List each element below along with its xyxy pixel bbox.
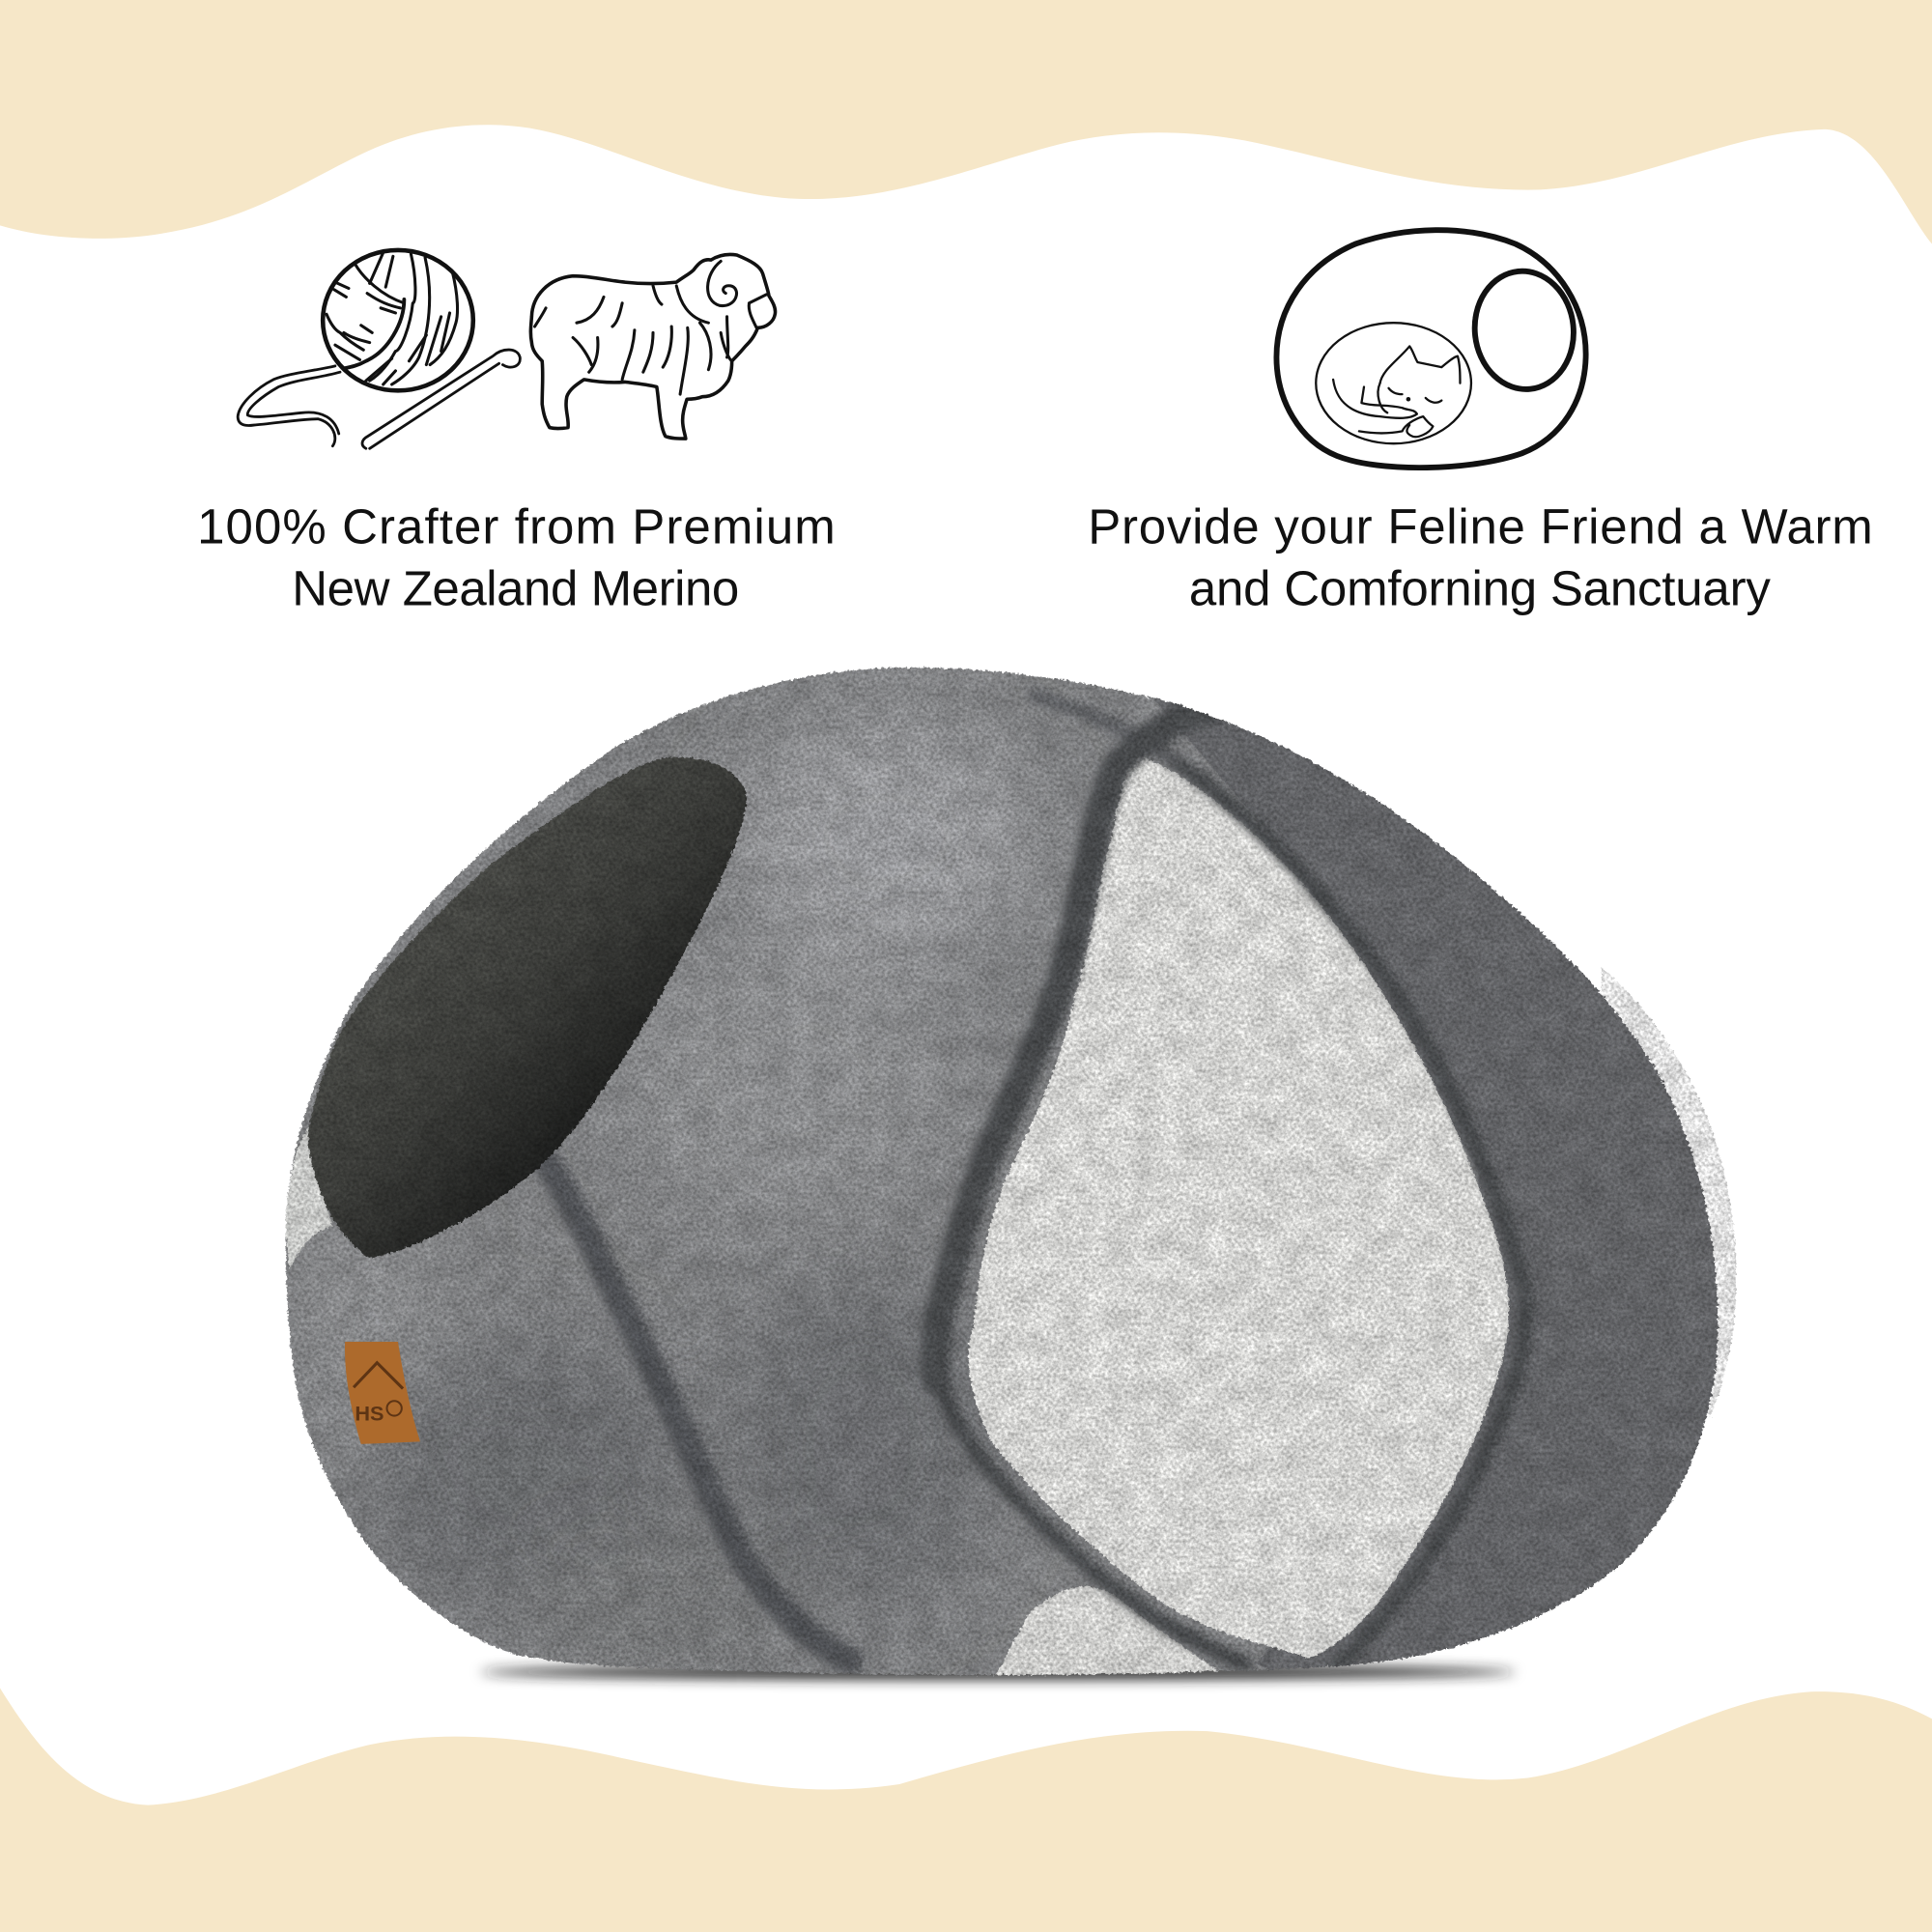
sheep body outline (530, 254, 776, 439)
crochet hook (362, 350, 520, 448)
cat nose (1406, 397, 1410, 402)
product: felt cat cave (246, 640, 1775, 1700)
entrance hole (308, 757, 747, 1258)
inner bed circle (1316, 323, 1471, 443)
back white felt edge (1602, 967, 1736, 1417)
caption line 1: 100% Crafter from Premium (197, 499, 836, 554)
text: sanctuary caption (1088, 498, 1873, 615)
pod opening (1469, 267, 1579, 394)
yarn ball (323, 250, 473, 390)
yarn thread (238, 366, 340, 446)
text: wool caption (197, 498, 836, 615)
white main patch (969, 754, 1509, 1659)
white lower lobe (995, 1586, 1218, 1677)
dark right band (1146, 690, 1749, 1688)
tag letters: HS (355, 1402, 384, 1426)
sheep horn and wool lines (535, 261, 766, 394)
tonal mottling (296, 715, 1035, 1663)
caption line 2: New Zealand Merino (292, 560, 739, 615)
caption line 1: Provide your Feline Friend a Warm (1088, 499, 1873, 554)
sleeping cat (1333, 346, 1460, 437)
icon: ball of yarn with crochet hook (238, 250, 520, 448)
felt body (285, 667, 1719, 1677)
caption line 2: and Comforning Sanctuary (1189, 560, 1771, 615)
leather brand tag (345, 1342, 420, 1444)
product shadow (480, 1664, 1516, 1680)
icon: cat pod with sleeping cat (1276, 230, 1586, 468)
tag roof mark (354, 1363, 403, 1389)
tag patch (345, 1342, 420, 1444)
dark seam lines (549, 696, 1526, 1665)
pod outline (1276, 230, 1586, 468)
icon: merino sheep (530, 254, 776, 439)
rim highlight (286, 1127, 332, 1269)
tag emblem (387, 1401, 402, 1416)
